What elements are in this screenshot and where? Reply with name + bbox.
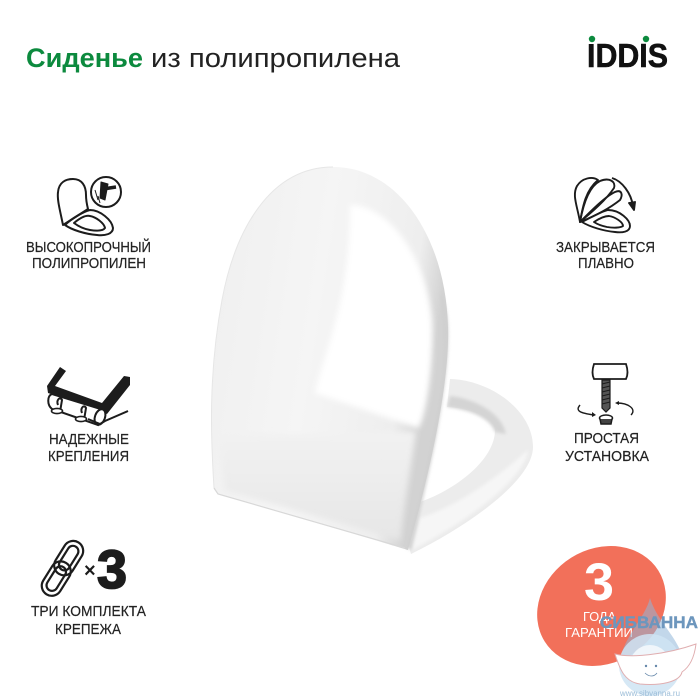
label: ЗАКРЫВАЕТСЯ	[556, 240, 655, 256]
label	[565, 431, 649, 465]
icon: chain links times three	[38, 537, 127, 600]
label: КРЕПЛЕНИЯ	[48, 449, 129, 465]
icon: chain links times three: ×	[84, 560, 96, 582]
title	[26, 43, 400, 73]
label: ТРИ КОМПЛЕКТА	[31, 604, 146, 620]
title: из полипропилена	[151, 43, 400, 73]
label	[26, 238, 151, 272]
feature: reliable fixings	[47, 367, 130, 465]
icon: seat with hammer	[58, 177, 121, 235]
feature: three fixing kits	[31, 537, 146, 638]
watermark: Sibvanna: www.sibvanna.ru	[619, 689, 680, 698]
feature: simple installation	[565, 364, 649, 465]
toilet seat product image	[211, 167, 533, 554]
logo: iDDiS: IDDIS	[587, 37, 668, 74]
label: ПОЛИПРОПИЛЕН	[32, 256, 146, 272]
label: ПРОСТАЯ	[574, 431, 639, 447]
warranty badge: ГАРАНТИИ	[565, 626, 633, 640]
warranty badge: 3	[584, 553, 614, 612]
label	[31, 604, 146, 638]
label: ВЫСОКОПРОЧНЫЙ	[26, 238, 151, 256]
warranty badge: ГОДА	[583, 610, 617, 624]
icon: soft-close lid	[575, 178, 635, 232]
label: КРЕПЕЖА	[55, 622, 121, 638]
title: Сиденье	[26, 43, 143, 73]
icon: hinge	[47, 367, 130, 426]
seat ring	[407, 379, 533, 554]
label	[48, 432, 129, 465]
feature: high strength polypropylene	[26, 177, 151, 272]
watermark: Sibvanna	[600, 598, 698, 698]
label: ПЛАВНО	[578, 256, 634, 272]
lid highlight	[315, 205, 432, 428]
label: НАДЕЖНЫЕ	[49, 432, 129, 448]
icon: screw and nut	[578, 364, 633, 424]
lid	[211, 167, 448, 550]
label	[556, 240, 655, 272]
icon: chain links times three: 3	[97, 540, 127, 600]
warranty badge	[514, 522, 689, 690]
label: УСТАНОВКА	[565, 449, 649, 465]
watermark: Sibvanna: СИБВАННА	[600, 613, 698, 632]
feature: closes smoothly	[556, 178, 655, 272]
